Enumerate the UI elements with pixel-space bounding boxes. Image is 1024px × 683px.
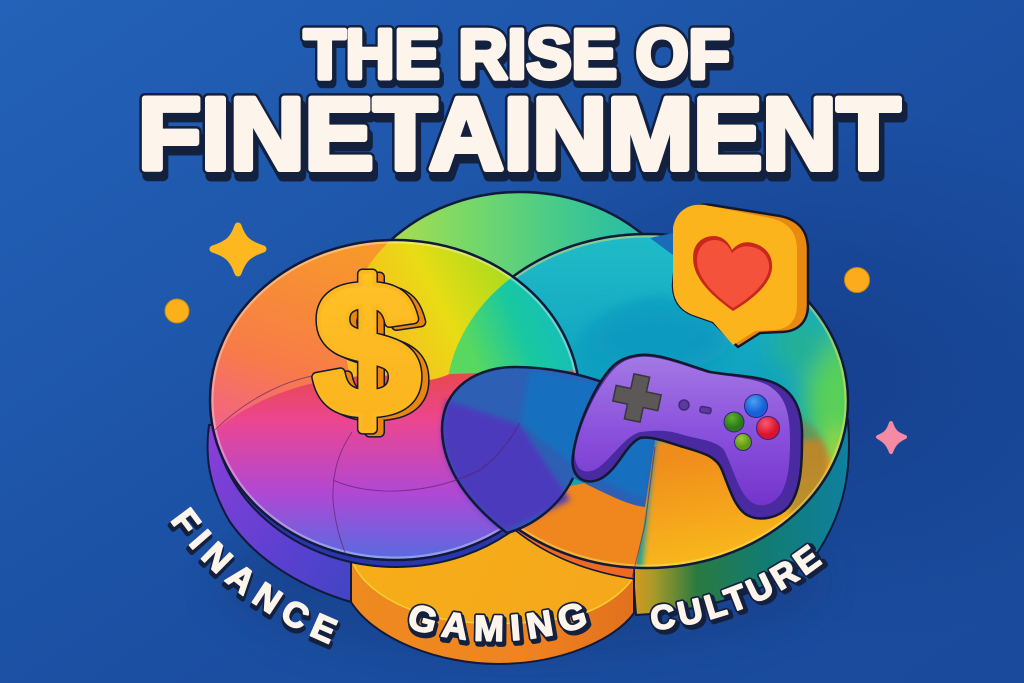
- action buttons: [724, 394, 780, 450]
- title line: THE RISE OF: THE RISE OF: [306, 20, 732, 98]
- orange band below culture disc: [515, 530, 634, 579]
- label: Gaming: GAMING: [408, 604, 592, 647]
- top green disc: [345, 192, 695, 488]
- label: Culture: CULTURE: [653, 543, 828, 635]
- labels: [168, 506, 828, 650]
- icon: dollar sign: $: [321, 247, 427, 459]
- decoration: orange dot: [844, 268, 870, 292]
- culture disc side wall: [632, 400, 849, 615]
- label: Culture: CULTURE: [650, 544, 822, 630]
- title line: THE RISE OF: THE RISE OF: [304, 15, 730, 93]
- title line: FINETAINMENT: FINETAINMENT: [138, 77, 900, 191]
- gaming disc top surface: [351, 520, 633, 624]
- title: [138, 15, 903, 198]
- d-pad: [610, 371, 664, 425]
- title line: THE RISE OF: THE RISE OF: [304, 15, 730, 93]
- label: Gaming: GAMING: [408, 602, 582, 643]
- decoration: yellow dot: [165, 299, 189, 323]
- finance dark rim: [213, 249, 579, 567]
- icon: dollar sign: $: [321, 247, 427, 459]
- faint arcs inside the discs: [215, 375, 655, 578]
- icon: speech bubble with heart: [673, 205, 808, 347]
- decoration: pink star: [878, 423, 905, 452]
- label: Gaming: GAMING: [409, 603, 586, 642]
- label: Finance: FINANCE: [170, 506, 338, 644]
- finance disc side wall: [207, 425, 420, 602]
- label: Finance: FINANCE: [168, 508, 340, 650]
- icon: dollar sign: $: [314, 244, 420, 456]
- centre overlap region: [442, 367, 655, 533]
- venn disc diagram: [195, 192, 865, 664]
- label: Culture: CULTURE: [649, 542, 822, 628]
- culture disc: [512, 232, 850, 570]
- shadow under discs: [220, 500, 820, 660]
- title line: FINETAINMENT: FINETAINMENT: [141, 84, 903, 198]
- gaming disc side wall: [351, 555, 634, 664]
- blue gap between green and culture discs: [650, 233, 673, 255]
- icon: game controller: [573, 355, 802, 518]
- icon: heart: [693, 236, 772, 311]
- finance disc: [208, 238, 579, 562]
- title line: FINETAINMENT: FINETAINMENT: [138, 77, 900, 191]
- centre buttons: [679, 400, 711, 414]
- icon: dollar sign: $: [314, 244, 420, 456]
- decoration: yellow star: [213, 226, 263, 273]
